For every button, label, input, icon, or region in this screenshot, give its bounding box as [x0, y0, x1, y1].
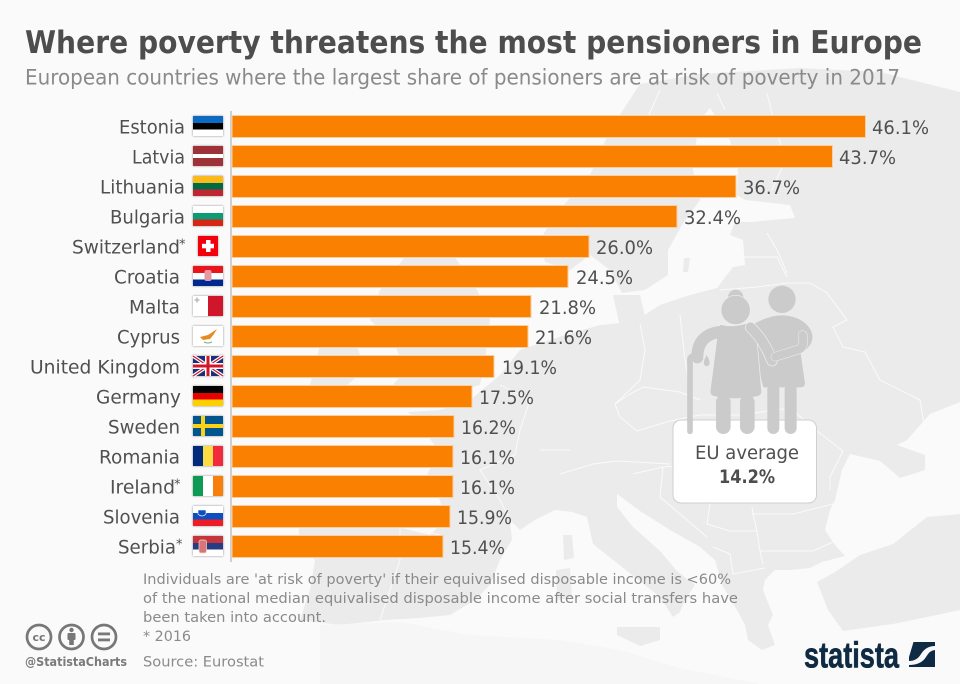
country labels: Serbia	[118, 537, 176, 559]
value labels: 15.9%	[457, 507, 512, 529]
bar chart	[30, 116, 929, 559]
value labels: 16.1%	[460, 477, 515, 499]
value labels: 17.5%	[479, 387, 534, 409]
footnote: * 2016	[143, 629, 191, 645]
country labels: Latvia	[132, 147, 185, 169]
country labels	[30, 117, 186, 559]
value labels: 26.0%	[596, 237, 653, 259]
flag: Lithuania	[193, 176, 223, 196]
country labels: *	[174, 478, 181, 493]
country labels: Switzerland	[72, 237, 180, 259]
country labels: Croatia	[114, 267, 180, 289]
flag: Serbia	[193, 536, 223, 556]
country labels: Bulgaria	[110, 207, 185, 229]
icon: creative commons licence: cc	[32, 631, 46, 644]
flag: Romania	[193, 446, 223, 466]
statista logo: statista	[804, 634, 900, 676]
country labels: Lithuania	[100, 177, 185, 199]
land masses	[298, 68, 960, 650]
flag: Latvia	[193, 146, 223, 166]
EU average label: EU average	[695, 442, 799, 464]
country labels: Ireland	[110, 477, 175, 499]
icon: statista mark	[909, 642, 935, 667]
country labels: Estonia	[119, 117, 185, 139]
north african coast	[320, 622, 760, 684]
value labels: 32.4%	[684, 207, 741, 229]
country labels: Slovenia	[103, 507, 180, 529]
footnote: Source: Eurostat	[143, 654, 264, 670]
country labels: Cyprus	[117, 327, 180, 349]
bars	[232, 116, 866, 558]
country labels: Germany	[96, 387, 181, 409]
value labels: 21.8%	[539, 297, 596, 319]
country labels: Malta	[129, 297, 180, 319]
callout: EU average	[673, 286, 816, 503]
callout box	[673, 420, 816, 503]
value labels	[450, 117, 929, 559]
vertical axis line	[230, 111, 232, 562]
value labels: 16.1%	[460, 447, 515, 469]
value labels: 19.1%	[502, 357, 557, 379]
footnote	[143, 572, 738, 670]
flag: Estonia	[193, 116, 223, 136]
national borders	[380, 90, 925, 620]
flag: Malta	[193, 296, 223, 316]
flag: Sweden	[193, 416, 223, 436]
footnote: Individuals are 'at risk of poverty' if their equivalised disposable income is <60%	[143, 572, 731, 588]
value labels: 15.4%	[450, 537, 505, 559]
flag: United Kingdom	[193, 356, 223, 376]
flag: Slovenia	[193, 506, 223, 526]
icon: creative commons licence	[27, 625, 116, 649]
value labels: 24.5%	[576, 267, 633, 289]
value labels: 43.7%	[839, 147, 896, 169]
flag: Germany	[193, 386, 223, 406]
flag: Bulgaria	[193, 206, 223, 226]
country labels: Sweden	[108, 417, 180, 439]
country labels: Romania	[99, 447, 180, 469]
footnote: been taken into account.	[143, 610, 326, 626]
country labels: *	[179, 238, 186, 253]
country labels: *	[176, 538, 183, 553]
value labels: 36.7%	[743, 177, 800, 199]
subtitle: European countries where the largest share of pensioners are at risk of poverty in 2017	[25, 66, 900, 90]
country labels: United Kingdom	[30, 357, 180, 379]
value labels: 16.2%	[461, 417, 516, 439]
flag: Ireland	[193, 476, 223, 496]
flag: Croatia	[193, 266, 223, 286]
credit handle: @StatistaCharts	[25, 655, 127, 669]
footnote: of the national median equivalised disposable income after social transfers have	[143, 591, 738, 607]
value labels: 46.1%	[872, 117, 929, 139]
flag: Switzerland	[198, 236, 218, 256]
value labels: 21.6%	[535, 327, 592, 349]
flag: Cyprus	[193, 326, 223, 346]
icon: elderly couple	[690, 286, 813, 434]
EU average value: 14.2%	[719, 466, 775, 488]
